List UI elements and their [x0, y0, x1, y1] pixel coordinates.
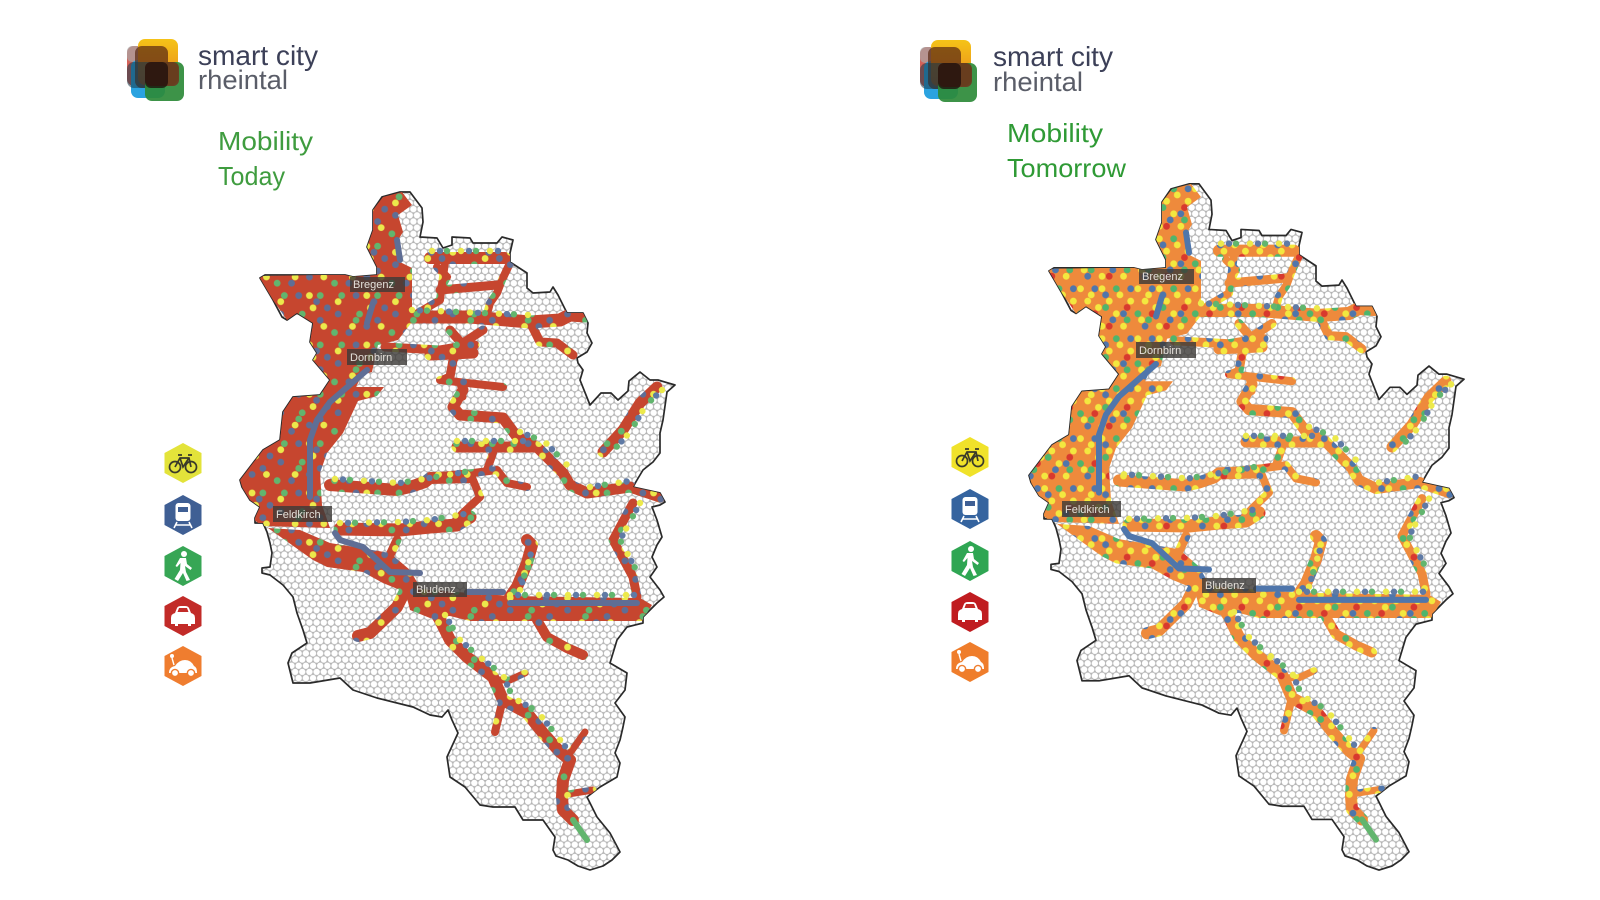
legend: tomorrow — [952, 437, 988, 682]
heading: Mobility Tomorrow — [1007, 118, 1126, 183]
icon: bicycle — [952, 437, 988, 477]
logo wordmark: rheintal — [198, 65, 288, 95]
icon: overlapping coloured squares — [127, 39, 184, 101]
heading: Mobility Today — [218, 126, 313, 191]
logo: smart city rheintal (today) — [127, 39, 318, 101]
icon: bicycle — [164, 443, 202, 483]
public transport strips today — [310, 240, 637, 603]
label: Bludenz: Bludenz — [1205, 580, 1245, 592]
logo wordmark: smart city — [198, 40, 318, 71]
label: Bregenz — [350, 277, 405, 292]
label: Bludenz — [413, 582, 467, 597]
label: Dornbirn — [1136, 342, 1196, 358]
label: Feldkirch — [1062, 501, 1121, 517]
label: Feldkirch: Feldkirch — [276, 509, 321, 521]
label: Dornbirn: Dornbirn — [1139, 345, 1181, 357]
icon: electric car — [952, 642, 988, 682]
heading: Mobility Tomorrow: Tomorrow — [1007, 153, 1126, 183]
logo wordmark — [993, 41, 1113, 97]
hexagon base map of Vorarlberg — [1029, 184, 1464, 870]
heading: Mobility Today: Today — [218, 161, 285, 191]
icon: pedestrian — [164, 546, 202, 586]
logo: smart city rheintal (tomorrow) — [920, 40, 1113, 102]
label: Dornbirn: Dornbirn — [350, 352, 392, 364]
public transport strips tomorrow — [1099, 232, 1426, 600]
icon: car — [952, 592, 988, 632]
label: Feldkirch — [273, 506, 332, 522]
label: Bludenz — [1202, 578, 1256, 593]
label: Bregenz: Bregenz — [353, 279, 394, 291]
label: Dornbirn — [347, 349, 407, 365]
icon: train — [952, 489, 988, 529]
icon: car — [164, 596, 202, 636]
icon: electric car — [164, 646, 202, 686]
logo wordmark: rheintal — [993, 67, 1083, 97]
heading: Mobility Tomorrow: Mobility — [1007, 118, 1103, 148]
label: Bludenz: Bludenz — [416, 584, 456, 596]
hexagon base map of Vorarlberg — [240, 192, 675, 870]
label: Bregenz: Bregenz — [1142, 271, 1183, 283]
mobility routes today, red dominated — [240, 192, 662, 840]
heading: Mobility Today: Mobility — [218, 126, 313, 156]
logo wordmark — [198, 40, 318, 95]
icon: overlapping coloured squares — [920, 40, 977, 102]
icon: pedestrian — [952, 541, 988, 581]
icon: train — [164, 495, 202, 535]
label: Bregenz — [1139, 269, 1194, 284]
logo wordmark: smart city — [993, 41, 1113, 72]
label: Feldkirch: Feldkirch — [1065, 504, 1110, 516]
legend: today — [164, 443, 202, 686]
mobility routes tomorrow, orange and mixed — [1029, 184, 1451, 840]
panel: map tomorrow — [1029, 184, 1464, 870]
panel: map today — [240, 192, 675, 870]
